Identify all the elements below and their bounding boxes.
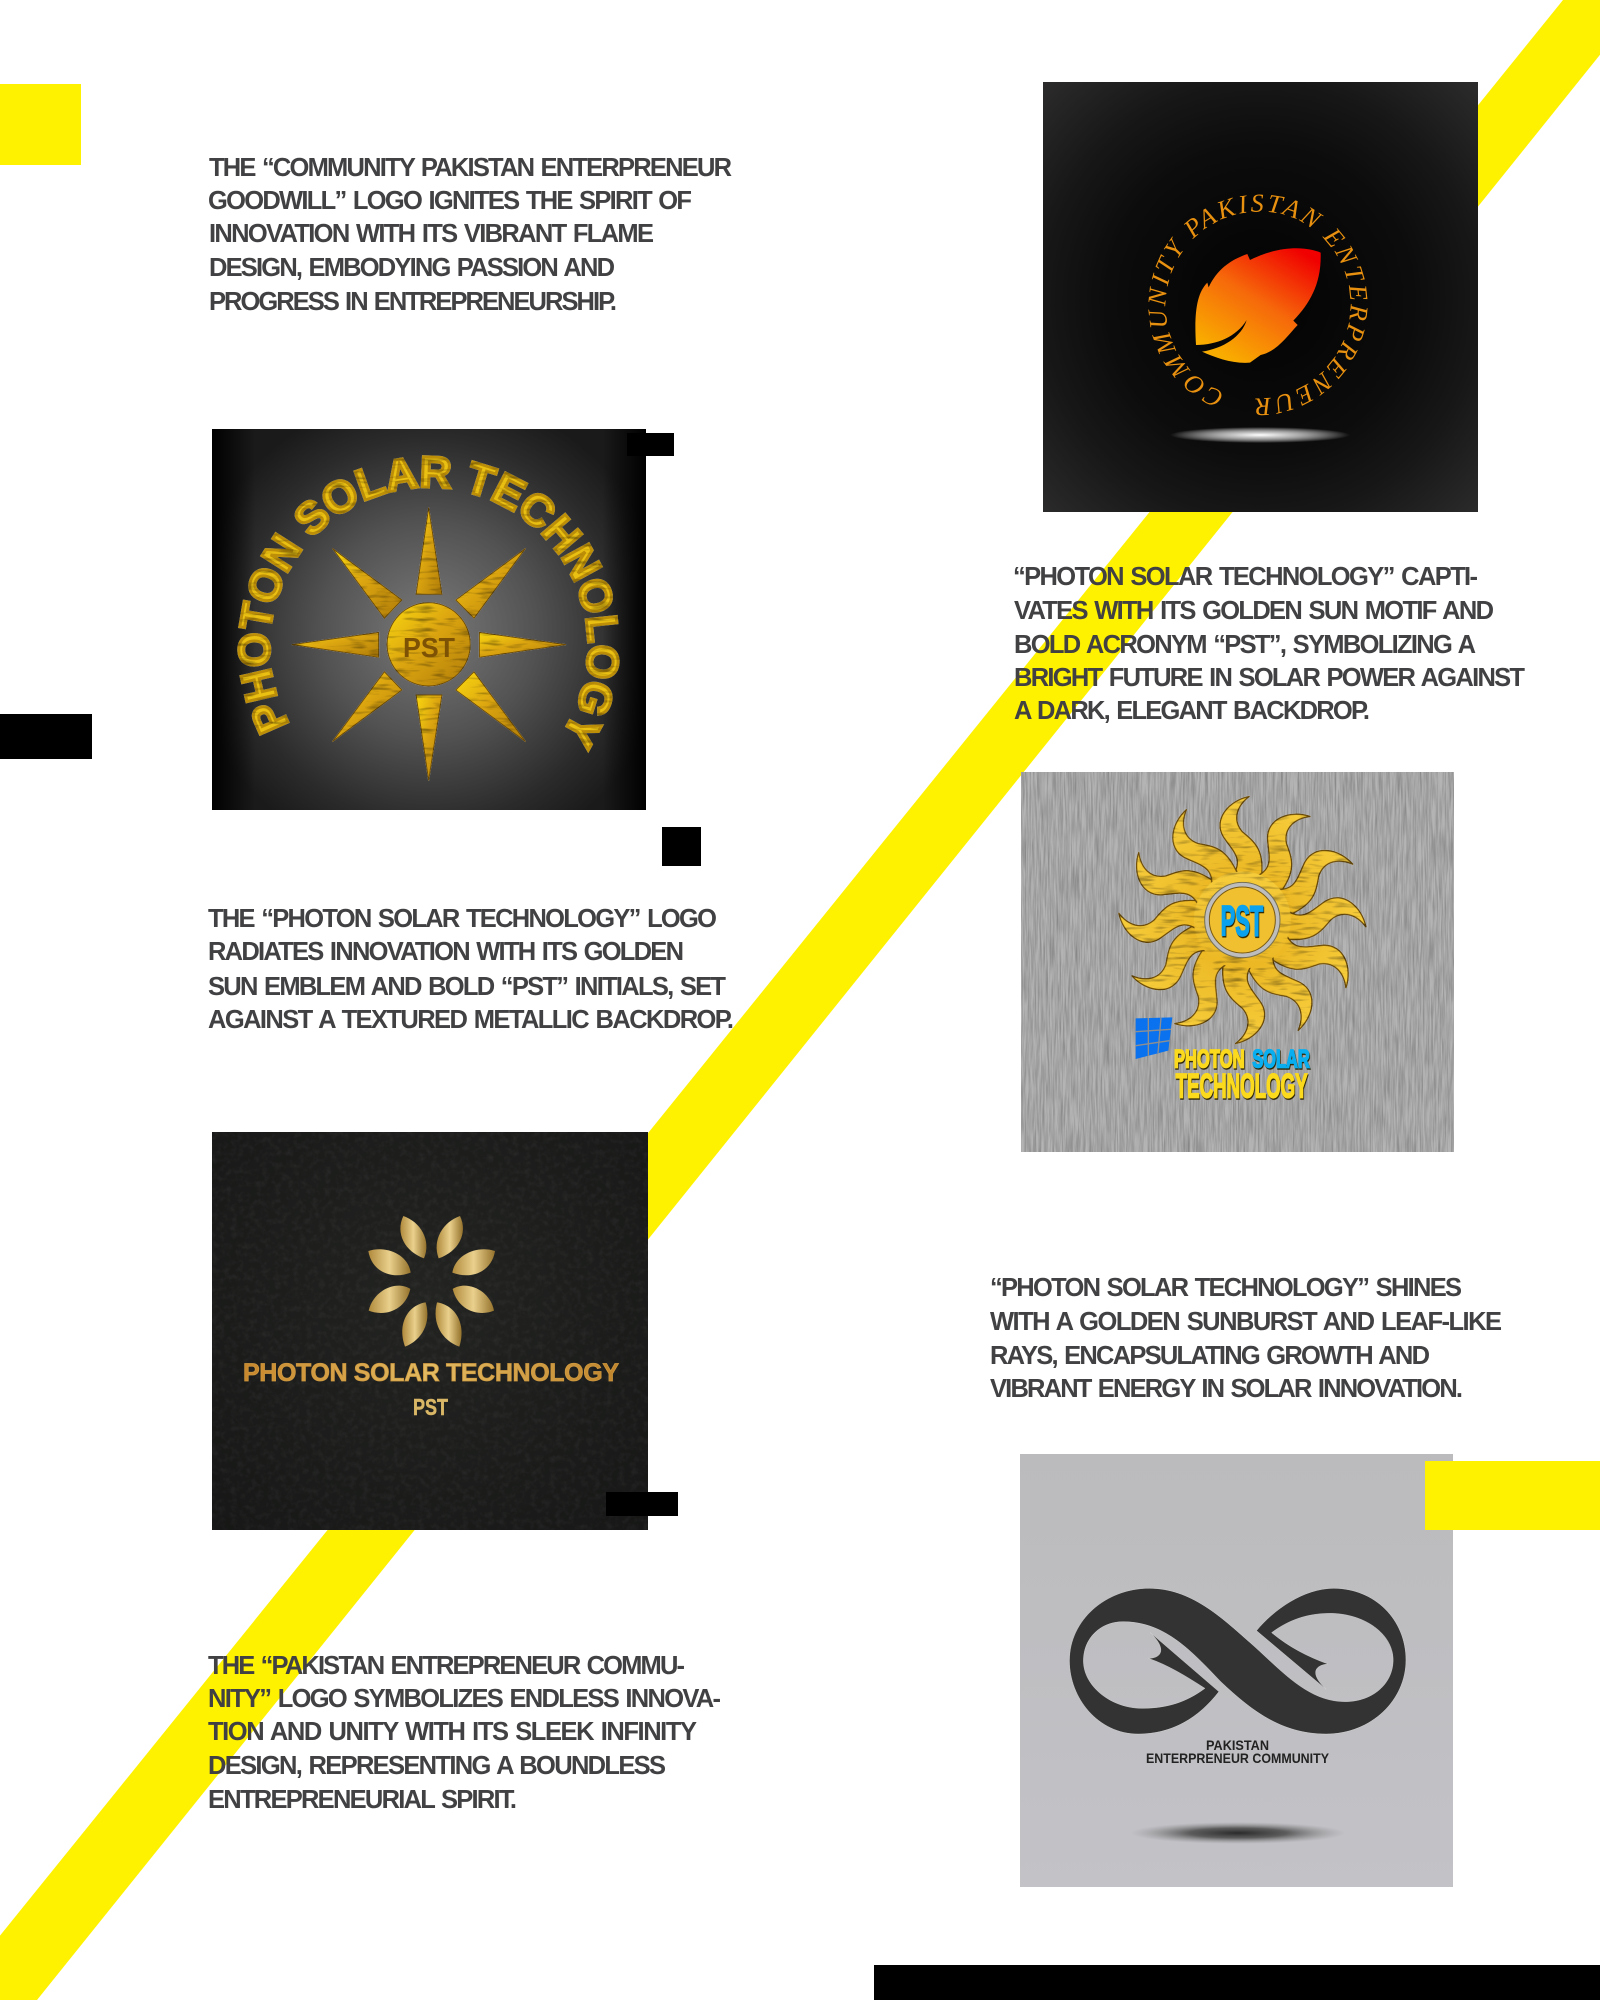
text block: community flame logo: THE “COMMUNITY PAKISTAN ENTERPRENEUR xyxy=(209,154,732,182)
circular logo text: COMMUNITY PAKISTAN ENTERPRENEUR xyxy=(1148,194,1368,416)
text block: entrepreneur infinity: NITY” LOGO SYMBOLIZES ENDLESS INNOVA- xyxy=(208,1685,721,1713)
text block: photon captivates: “PHOTON SOLAR TECHNOLOGY” CAPTI- xyxy=(1013,563,1478,591)
black tab on flower panel xyxy=(606,1492,678,1516)
light glow xyxy=(1170,427,1350,443)
yellow block on infinity panel xyxy=(1425,1461,1600,1530)
text block: photon captivates: A DARK, ELEGANT BACKDROP. xyxy=(1014,697,1370,725)
icon: infinity symbol xyxy=(1069,1588,1406,1734)
panel: photon solar metallic sun xyxy=(212,429,646,810)
icon: solar panel xyxy=(1136,1017,1172,1059)
black footer bar xyxy=(874,1965,1600,2000)
metallic backdrop xyxy=(212,429,646,810)
panel: gold flower logo xyxy=(212,1132,648,1530)
text block: entrepreneur infinity: DESIGN, REPRESENTING A BOUNDLESS xyxy=(208,1752,666,1780)
text block: photon radiates: THE “PHOTON SOLAR TECHNOLOGY” LOGO xyxy=(208,905,717,933)
text block: photon captivates: VATES WITH ITS GOLDEN SUN MOTIF AND xyxy=(1014,597,1494,625)
text block: photon captivates: BOLD ACRONYM “PST”, SYMBOLIZING A xyxy=(1014,631,1476,659)
wavy golden sunburst xyxy=(1119,796,1366,1105)
logo wordmark: SOLAR xyxy=(1252,1046,1310,1074)
panel: infinity logo xyxy=(1020,1454,1453,1887)
text block: photon shines: RAYS, ENCAPSULATING GROWTH AND xyxy=(990,1342,1430,1370)
icon: gold petals xyxy=(368,1216,495,1347)
text block: entrepreneur infinity xyxy=(208,1652,721,1814)
panel: flame logo xyxy=(1043,82,1478,512)
text block: entrepreneur infinity: TION AND UNITY WITH ITS SLEEK INFINITY xyxy=(208,1718,697,1746)
text block: photon radiates: AGAINST A TEXTURED METALLIC BACKDROP. xyxy=(208,1006,734,1034)
golden sun emblem xyxy=(292,507,566,781)
text block: photon shines: WITH A GOLDEN SUNBURST AND LEAF-LIKE xyxy=(990,1308,1502,1336)
text block: photon radiates: SUN EMBLEM AND BOLD “PST” INITIALS, SET xyxy=(208,973,726,1001)
arched logo text: PHOTON SOLAR TECHNOLOGY xyxy=(237,455,620,754)
text block: photon shines xyxy=(990,1274,1502,1403)
black square xyxy=(662,827,701,866)
black left bar xyxy=(0,714,92,759)
infinity logo caption: PAKISTAN xyxy=(1206,1737,1269,1753)
text block: entrepreneur infinity: ENTREPRENEURIAL SPIRIT. xyxy=(208,1786,517,1814)
text block: photon radiates: RADIATES INNOVATION WITH ITS GOLDEN xyxy=(208,938,684,966)
logo wordmark: PHOTON xyxy=(1174,1046,1245,1074)
text block: community flame logo: INNOVATION WITH ITS VIBRANT FLAME xyxy=(209,220,654,248)
text block: community flame logo: DESIGN, EMBODYING PASSION AND xyxy=(209,254,615,282)
text block: photon captivates: BRIGHT FUTURE IN SOLAR POWER AGAINST xyxy=(1014,664,1525,692)
text block: community flame logo: PROGRESS IN ENTREPRENEURSHIP. xyxy=(209,288,617,316)
yellow corner square xyxy=(0,84,81,165)
brushed metal backdrop xyxy=(1021,772,1454,1152)
text block: community flame logo xyxy=(208,154,732,316)
text block: entrepreneur infinity: THE “PAKISTAN ENTREPRENEUR COMMU- xyxy=(208,1652,685,1680)
icon: flame leaf xyxy=(1195,248,1321,363)
text block: community flame logo: GOODWILL” LOGO IGNITES THE SPIRIT OF xyxy=(208,187,692,215)
text block: photon shines: “PHOTON SOLAR TECHNOLOGY” SHINES xyxy=(990,1274,1462,1302)
sunburst initials: PST xyxy=(1221,897,1263,945)
textured black paper xyxy=(212,1132,648,1530)
text block: photon radiates xyxy=(208,905,734,1034)
floating shadow xyxy=(1130,1822,1346,1844)
infinity logo caption xyxy=(1146,1737,1330,1766)
infinity logo caption: ENTERPRENEUR COMMUNITY xyxy=(1146,1750,1330,1766)
logo wordmark xyxy=(1174,1046,1310,1105)
panel: sunburst logo on brushed metal xyxy=(1021,772,1454,1152)
grey backdrop xyxy=(1020,1454,1453,1887)
text block: photon shines: VIBRANT ENERGY IN SOLAR INNOVATION. xyxy=(990,1375,1463,1403)
logo wordmark: TECHNOLOGY xyxy=(1176,1067,1308,1105)
flame panel background xyxy=(1043,82,1478,512)
gold initials: PST xyxy=(413,1394,448,1420)
text block: photon captivates xyxy=(1013,563,1525,725)
gold wordmark: PHOTON SOLAR TECHNOLOGY xyxy=(243,1359,619,1387)
black tab on metallic panel xyxy=(627,433,674,456)
emblem initials: PST xyxy=(403,632,455,663)
